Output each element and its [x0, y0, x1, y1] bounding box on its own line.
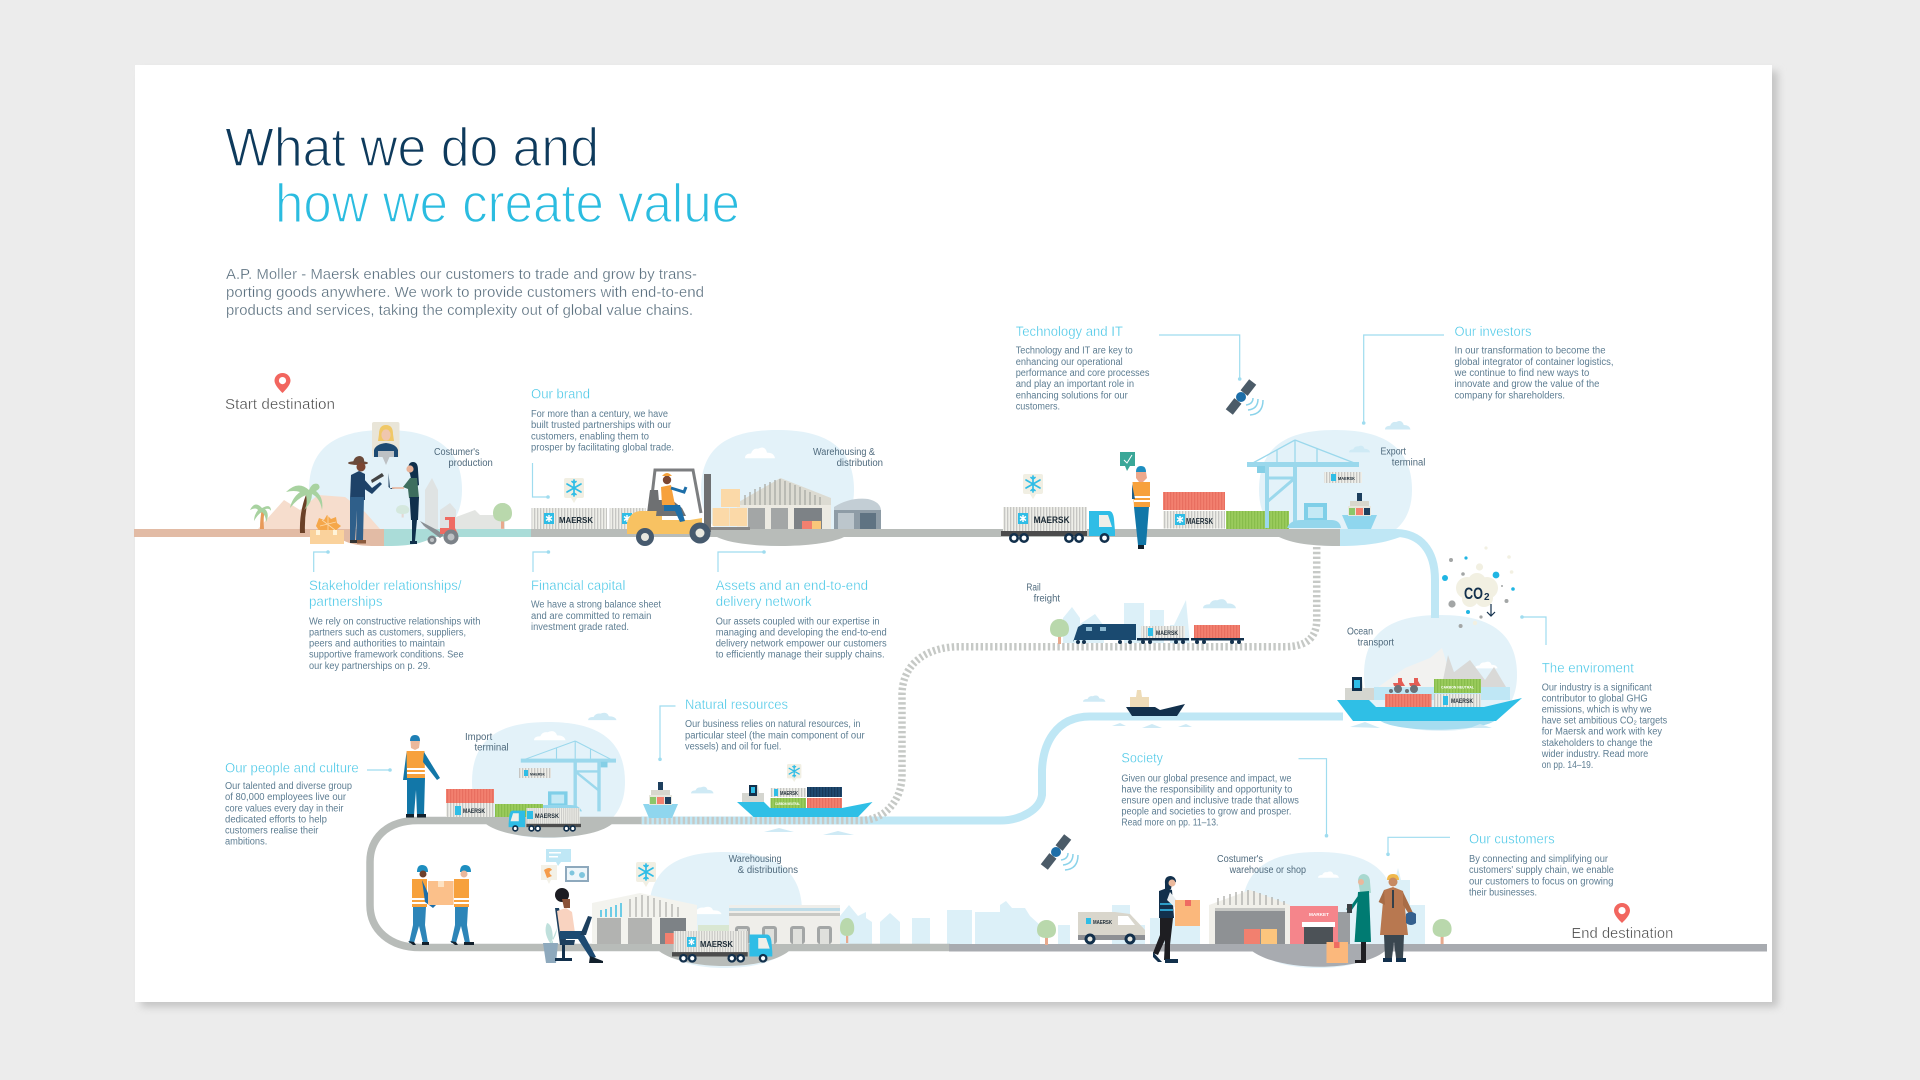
icon: satellite [1041, 834, 1078, 870]
large ship: natural resources: MAERSK [780, 791, 798, 797]
icon: snowflake tag [1023, 474, 1043, 499]
truck: import [509, 808, 581, 832]
block: the environment: The enviroment [1542, 660, 1634, 675]
labels: export terminal: terminal [1392, 458, 1425, 468]
labels: costumer's production [434, 447, 493, 469]
icon: tree [840, 918, 854, 943]
hanging container: import: MAERSK [530, 772, 545, 776]
block: stakeholder relationships: We rely on constructive relationships with [309, 616, 480, 627]
block: our brand: built trusted partnerships with our [531, 420, 672, 431]
warehouse and boxes: distribution [737, 478, 881, 529]
man in brown coat [1379, 874, 1416, 962]
forklift with driver [627, 470, 750, 546]
connector: technology [1159, 335, 1241, 381]
title: What we do and [225, 116, 599, 178]
block: our brand: customers, enabling them to [531, 431, 649, 442]
labels: import terminal [465, 732, 509, 754]
train [1073, 624, 1244, 644]
connector: financial capital [533, 550, 550, 572]
block: stakeholder relationships: our key partnerships on p. 29. [309, 661, 430, 672]
block: the environment: have set ambitious CO₂ targets [1542, 716, 1667, 727]
block: our investors: company for shareholders. [1454, 390, 1565, 401]
block: natural resources: vessels) and oil for fuel. [685, 741, 781, 752]
road: blue route to rail junction [641, 716, 1343, 820]
icon: snowflake tag [564, 478, 584, 503]
block: stakeholder relationships: partnerships [309, 594, 383, 609]
block: our customers: our customers to focus on growing [1469, 876, 1613, 887]
portrait card with pointer [372, 422, 400, 465]
labels: customer's warehouse or shop: warehouse or shop [1229, 865, 1306, 876]
seated woman with laptop and plant [543, 888, 603, 963]
intro paragraph: porting goods anywhere. We work to provide customers with end-to-end [226, 285, 704, 301]
market shop: MARKET [1309, 912, 1329, 917]
labels: customer's warehouse or shop [1217, 854, 1306, 876]
block: assets and delivery network: to efficiently manage their supply chains. [716, 650, 885, 661]
container stack: import [446, 789, 543, 817]
block: technology and IT: Technology and IT [1016, 324, 1123, 339]
icon: CO2 cloud with particles: CO [1464, 584, 1483, 603]
block: our people and culture: of 80,000 employees live our [225, 792, 347, 803]
courier with parcel [1153, 876, 1200, 963]
customer with laptop [388, 462, 419, 544]
block: financial capital: Financial capital [531, 578, 625, 593]
labels: import terminal: Import [465, 732, 493, 743]
block: society: Read more on pp. 11–13. [1121, 818, 1218, 829]
icon: tree [1433, 919, 1452, 944]
start pin [274, 373, 290, 393]
block: our customers: their businesses. [1469, 887, 1537, 898]
icon: CO2 cloud with particles: 2 [1484, 592, 1490, 603]
small dark ship [1126, 690, 1185, 716]
clouds [534, 421, 1498, 914]
block: assets and delivery network: managing and developing the end-to-end [716, 628, 887, 639]
icon: checkmark bubble [1120, 452, 1135, 471]
labels: import terminal: terminal [474, 743, 509, 754]
icon: snowflake tag [636, 862, 656, 887]
icons: speech bubbles [541, 849, 589, 884]
icon: boxes and shrub [310, 515, 344, 544]
end destination label: End destination [1571, 925, 1673, 942]
block: our people and culture: Our people and culture [225, 760, 359, 775]
block: our brand [531, 387, 674, 454]
train: MAERSK [1156, 631, 1179, 637]
block: financial capital [531, 578, 661, 633]
maersk containers on road: MAERSK [559, 515, 594, 525]
block: society: Given our global presence and impact, we [1121, 773, 1292, 784]
labels: costumer's production: Costumer's [434, 447, 480, 458]
block: society: people and societies to grow and prosper. [1121, 807, 1291, 818]
block: our brand: prosper by facilitating global trade. [531, 443, 674, 454]
icon: tractor [420, 517, 458, 544]
export crane [1247, 440, 1359, 528]
hanging container: import [519, 768, 551, 778]
block: assets and delivery network: Assets and an end-to-end [716, 578, 868, 593]
block: technology and IT: enhancing our operational [1016, 357, 1123, 368]
road: lower route [370, 820, 1767, 967]
icon: palm trees [250, 484, 322, 533]
block: the environment [1541, 660, 1667, 771]
block: our investors: Our investors [1454, 324, 1532, 339]
connector: customers [1386, 837, 1450, 856]
block: assets and delivery network: Our assets coupled with our expertise in [716, 616, 880, 627]
block: society [1121, 751, 1299, 829]
block: assets and delivery network [716, 578, 887, 661]
connector: people [367, 768, 392, 772]
connector: investors [1362, 335, 1444, 425]
parcel [1326, 942, 1348, 963]
block: stakeholder relationships: peers and authorities to maintain [309, 639, 445, 650]
truck: warehouse: MAERSK [700, 939, 734, 949]
maersk containers on road [532, 508, 646, 529]
icon: tree [1037, 920, 1056, 945]
block: our people and culture: dedicated efforts to help [225, 814, 327, 825]
icon: snowflake tag [787, 764, 801, 782]
city skyline: lower road [840, 868, 1425, 944]
connector: society [1298, 759, 1328, 838]
card shadow [141, 71, 1778, 1007]
warehouse: customer [1209, 890, 1290, 944]
delivery van: MAERSK [1093, 920, 1112, 926]
labels: export terminal: Export [1380, 446, 1406, 458]
background domes [309, 430, 1517, 968]
block: our customers: By connecting and simplifying our [1469, 854, 1609, 865]
market shop [1290, 906, 1350, 944]
labels: ocean transport [1347, 626, 1394, 648]
container stack: export: MAERSK [1186, 517, 1213, 526]
block: our people and culture [225, 760, 359, 848]
labels: warehousing and distribution: Warehousing & [813, 447, 875, 458]
labels: warehousing and distribution [813, 447, 883, 469]
title: how we create value [275, 172, 740, 234]
block: the environment: wider industry. Read more [1541, 749, 1649, 760]
connector: stakeholder [314, 550, 330, 572]
block: the environment: for Maersk and work with key [1542, 727, 1662, 738]
block: technology and IT: customers. [1016, 401, 1060, 412]
block: our brand: Our brand [531, 387, 590, 402]
worker: import [403, 735, 440, 818]
block: technology and IT: Technology and IT are key to [1016, 346, 1133, 357]
labels: customer's warehouse or shop: Costumer's [1217, 854, 1263, 865]
block: technology and IT: enhancing solutions for our [1016, 390, 1128, 401]
block: society: ensure open and inclusive trade that allows [1121, 796, 1299, 807]
labels: rail freight: Rail [1026, 583, 1041, 594]
block: the environment: stakeholders to change the [1542, 738, 1653, 749]
labels: costumer's production: production [448, 458, 493, 469]
block: our investors: In our transformation to become the [1454, 346, 1606, 357]
labels: warehousing and distribution: distribution [837, 458, 883, 469]
labels: warehousing and distributions: & distributions [738, 865, 798, 876]
large ship: natural resources [737, 785, 872, 835]
truck: export [1001, 507, 1115, 543]
end pin [1614, 903, 1630, 923]
intro paragraph: products and services, taking the complexity out of global value chains. [226, 303, 693, 319]
block: technology and IT: and play an important role in [1016, 379, 1134, 390]
labels: rail freight: freight [1034, 594, 1060, 605]
truck: warehouse [672, 931, 772, 963]
farmer with tablet [348, 456, 384, 544]
warehouse: lower left [592, 893, 697, 944]
block: natural resources: Natural resources [685, 697, 788, 712]
block: the environment: emissions, which is why we [1542, 705, 1652, 716]
large ship: ocean transport: MAERSK [1451, 699, 1474, 705]
block: financial capital: and are committed to remain [531, 611, 651, 622]
road: start segment [134, 529, 1400, 546]
stacked cardboard boxes [713, 489, 747, 526]
white card [135, 65, 1772, 1002]
block: financial capital: investment grade rated. [531, 622, 629, 633]
labels: rail freight [1026, 583, 1060, 605]
connector: assets [718, 550, 766, 572]
connector: our brand [532, 463, 550, 499]
block: natural resources [685, 697, 865, 752]
small ship: export [1342, 493, 1377, 529]
block: natural resources: particular steel (the main component of our [685, 730, 865, 741]
block: technology and IT: performance and core processes [1016, 368, 1149, 379]
rail track [641, 547, 1317, 820]
block: our investors: global integrator of container logistics, [1454, 357, 1614, 368]
connector: environment [1520, 615, 1546, 645]
title [225, 116, 740, 234]
block: stakeholder relationships [309, 578, 480, 672]
large ship: ocean transport: CARBON NEUTRAL [1441, 684, 1474, 690]
two workers carrying box [408, 865, 474, 945]
large ship: natural resources: CARBON NEUTRAL [775, 802, 801, 806]
block: natural resources: Our business relies on natural resources, in [685, 719, 860, 730]
labels: warehousing and distributions: Warehousing [729, 854, 782, 865]
start destination label: Start destination [225, 396, 335, 413]
truck: export: MAERSK [1034, 515, 1070, 525]
intro paragraph [226, 267, 704, 319]
road: blue ocean route [1340, 533, 1435, 618]
connector: natural resources [658, 706, 676, 761]
small ship: import [643, 782, 678, 818]
icon: CO2 cloud with particles [1442, 546, 1515, 628]
block: the environment: contributor to global GHG [1542, 694, 1648, 705]
worker with radio [1132, 466, 1150, 549]
block: society: have the responsibility and opportunity to [1121, 785, 1293, 796]
woman in teal [1347, 874, 1371, 963]
block: our investors: we continue to find new ways to [1454, 368, 1590, 379]
block: assets and delivery network: delivery network empower our customers [716, 639, 887, 650]
hanging container: export: MAERSK [1338, 476, 1356, 481]
block: stakeholder relationships: supportive framework conditions. See [309, 650, 464, 661]
labels: ocean transport: Ocean [1347, 626, 1373, 637]
warehouse: docks [698, 905, 840, 944]
block: our investors: innovate and grow the value of the [1454, 379, 1600, 390]
mountains: ocean [1374, 648, 1510, 700]
block: technology and IT [1016, 324, 1149, 412]
intro paragraph: A.P. Moller - Maersk enables our customers to trade and grow by trans- [226, 267, 697, 283]
container stack: export [1163, 492, 1289, 529]
block: financial capital: We have a strong balance sheet [531, 600, 661, 611]
city skyline: rail [1063, 600, 1190, 643]
block: our investors [1454, 324, 1614, 401]
labels: ocean transport: transport [1358, 637, 1394, 648]
mountains and skyline: start [258, 478, 512, 529]
icon: satellite [1226, 379, 1263, 415]
block: stakeholder relationships: partners such as customers, suppliers, [309, 628, 466, 639]
truck: import: MAERSK [535, 813, 559, 820]
block: society: Society [1121, 751, 1163, 766]
block: the environment: on pp. 14–19. [1542, 760, 1593, 771]
icon: tree [1050, 619, 1069, 644]
block: the environment: Our industry is a significant [1542, 682, 1652, 693]
labels: warehousing and distributions [729, 854, 798, 876]
block: our customers: customers' supply chain, we enable [1469, 865, 1614, 876]
block: assets and delivery network: delivery network [716, 594, 812, 609]
container stack: import: MAERSK [463, 809, 486, 815]
delivery van [1078, 912, 1145, 944]
block: our people and culture: customers realise their [225, 825, 319, 836]
waves: small ship [1112, 723, 1192, 728]
block: our people and culture: Our talented and diverse group [225, 781, 352, 792]
block: stakeholder relationships: Stakeholder relationships/ [309, 578, 462, 593]
labels: export terminal [1380, 446, 1425, 468]
block: our brand: For more than a century, we have [531, 409, 668, 420]
hanging container: export [1324, 472, 1362, 483]
block: our customers [1469, 832, 1614, 898]
block: our people and culture: ambitions. [225, 837, 267, 848]
block: our customers: Our customers [1469, 832, 1555, 847]
import crane [521, 741, 616, 811]
large ship: ocean transport [1337, 677, 1522, 730]
block: our people and culture: core values every day in their [225, 803, 344, 814]
